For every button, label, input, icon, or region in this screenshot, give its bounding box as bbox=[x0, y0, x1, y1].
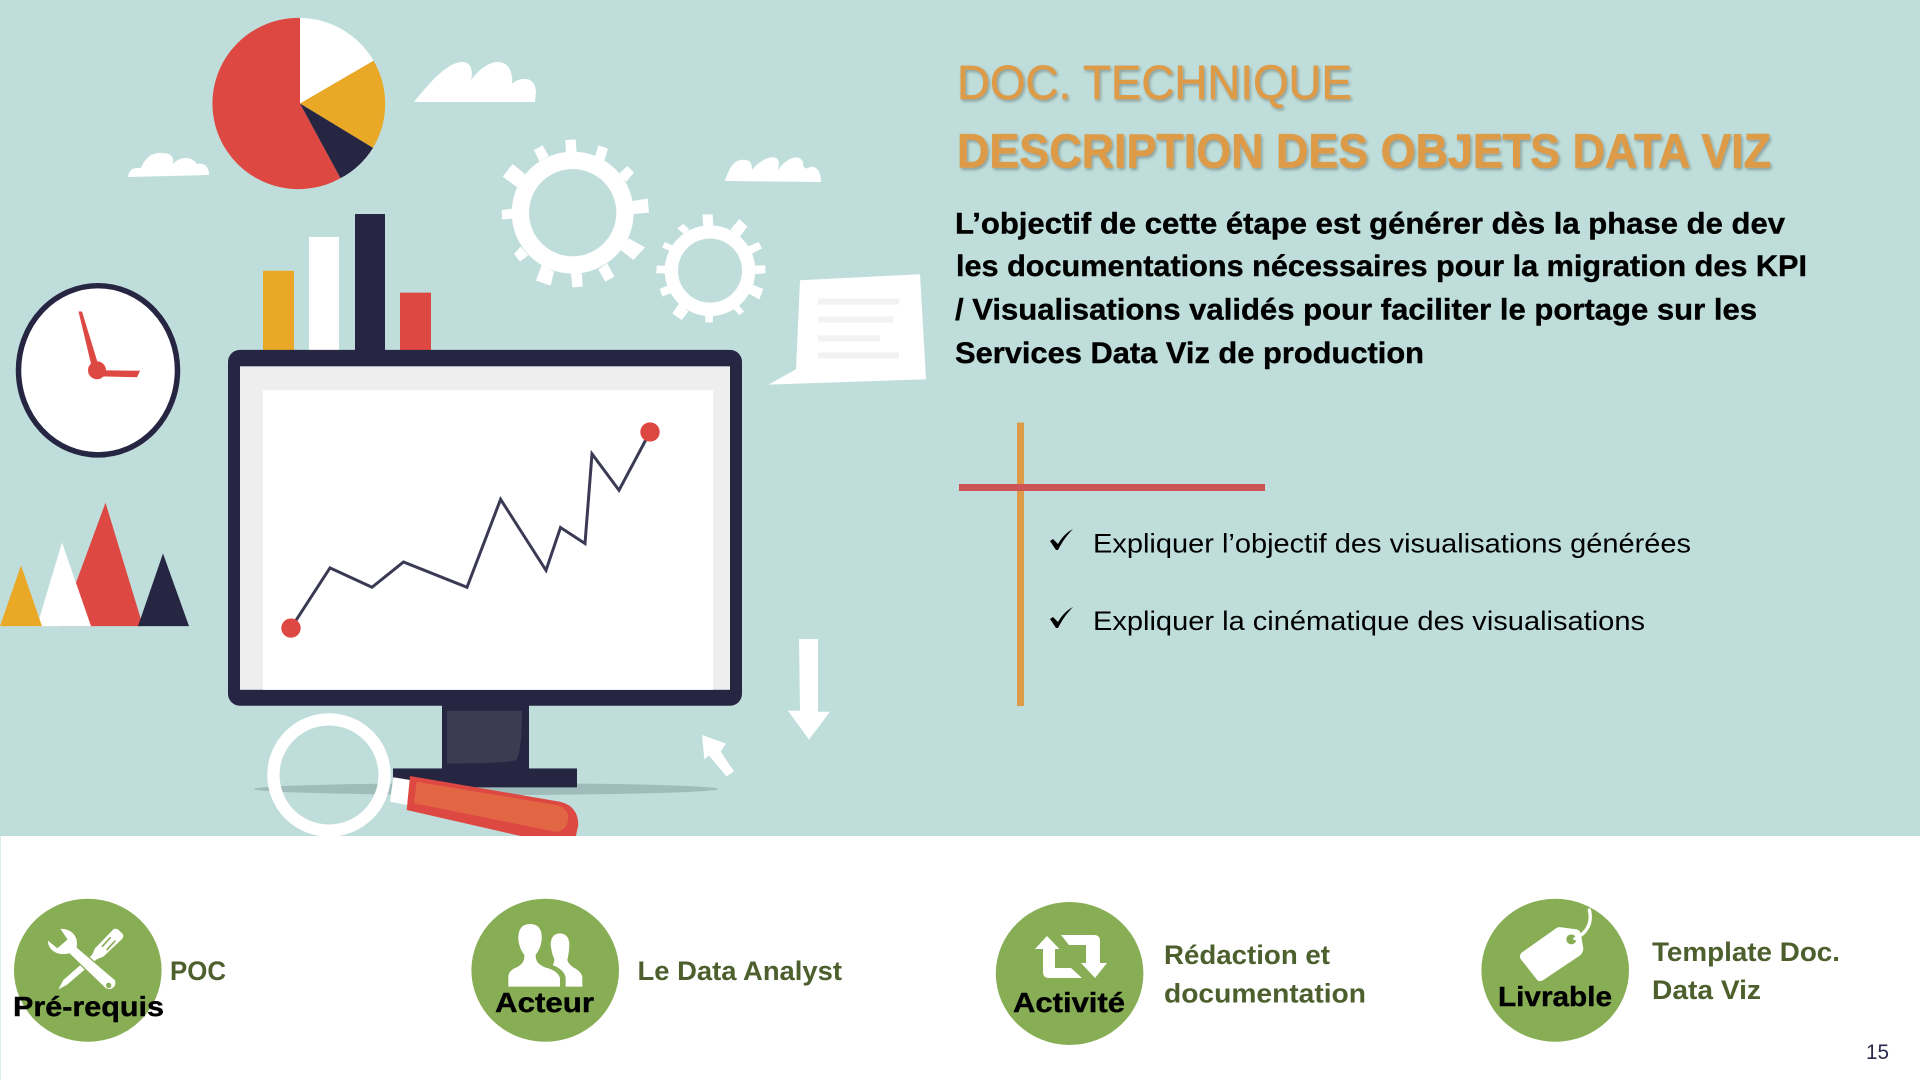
text block: objective: / Visualisations validés pour faciliter le portage sur les bbox=[955, 294, 1757, 326]
footer item: pré-requis bbox=[13, 899, 226, 1042]
checklist bbox=[1050, 528, 1691, 636]
value: Le Data Analyst: Le Data Analyst bbox=[638, 956, 842, 986]
footer item: livrable bbox=[1481, 899, 1840, 1042]
green circle bbox=[14, 899, 162, 1042]
icon: tag bbox=[1520, 910, 1590, 981]
text block: objective: les documentations nécessaires pour la migration des KPI bbox=[956, 250, 1807, 283]
illustration: data analysis scene bbox=[0, 18, 926, 840]
icon: large cloud bbox=[414, 62, 536, 102]
icon: left cloud bbox=[128, 153, 209, 177]
title: DESCRIPTION DES OBJETS DATA VIZ bbox=[957, 126, 1771, 179]
icon: right cloud bbox=[725, 157, 821, 182]
title: DOC. TECHNIQUE bbox=[957, 57, 1352, 110]
text block: objective bbox=[955, 208, 1807, 370]
value: Rédaction et documentation bbox=[1164, 940, 1366, 1009]
icon: up-left arrow bbox=[702, 735, 734, 776]
icon: two people bbox=[508, 924, 582, 987]
icon: check mark 2 bbox=[1050, 607, 1073, 628]
footer item: acteur bbox=[471, 899, 842, 1042]
icon: magnifying glass bbox=[273, 719, 578, 840]
green circle bbox=[996, 902, 1143, 1045]
icon: down arrow bbox=[788, 639, 830, 740]
icon: wrench and screwdriver bbox=[47, 928, 123, 990]
icon: speech bubble bbox=[768, 274, 926, 385]
icon: triangles bbox=[0, 503, 189, 626]
text block: objective: L’objectif de cette étape est générer dès la phase de dev bbox=[955, 208, 1785, 241]
green circle bbox=[1481, 899, 1629, 1042]
bullet text 1: Expliquer l’objectif des visualisations générées bbox=[1093, 528, 1691, 558]
page number: 15 bbox=[1866, 1041, 1889, 1064]
panel: teal background bbox=[0, 0, 1920, 836]
monitor with line chart bbox=[228, 350, 742, 787]
value: Rédaction et documentation: documentation bbox=[1164, 979, 1366, 1009]
cross divider lines bbox=[959, 423, 1265, 706]
icon: large gear bbox=[502, 139, 649, 287]
value: Template Doc. Data Viz bbox=[1652, 937, 1840, 1005]
line chart bbox=[281, 422, 660, 638]
icon: pie chart bbox=[212, 18, 385, 189]
label: Livrable: Livrable bbox=[1498, 981, 1612, 1012]
text block: objective: Services Data Viz de production bbox=[955, 337, 1424, 370]
label: Activité: Activité bbox=[1013, 987, 1125, 1018]
icon: clock bbox=[18, 286, 178, 455]
bar chart above monitor bbox=[263, 214, 431, 352]
value: POC: POC bbox=[170, 956, 226, 986]
footer item: activité bbox=[996, 902, 1366, 1045]
label: Pré-requis: Pré-requis bbox=[13, 991, 164, 1022]
icon: check mark 1 bbox=[1050, 529, 1073, 550]
icon: repeat arrows bbox=[1035, 935, 1107, 978]
shadow under monitor bbox=[254, 783, 718, 795]
icon: small gear bbox=[656, 214, 765, 322]
bullet text 2: Expliquer la cinématique des visualisations bbox=[1093, 606, 1645, 636]
value: Rédaction et documentation: Rédaction et bbox=[1164, 940, 1330, 970]
label: Acteur: Acteur bbox=[495, 987, 594, 1018]
value: Template Doc. Data Viz: Data Viz bbox=[1652, 975, 1761, 1005]
value: Template Doc. Data Viz: Template Doc. bbox=[1652, 937, 1840, 967]
title bbox=[957, 57, 1771, 179]
green circle bbox=[471, 899, 619, 1042]
